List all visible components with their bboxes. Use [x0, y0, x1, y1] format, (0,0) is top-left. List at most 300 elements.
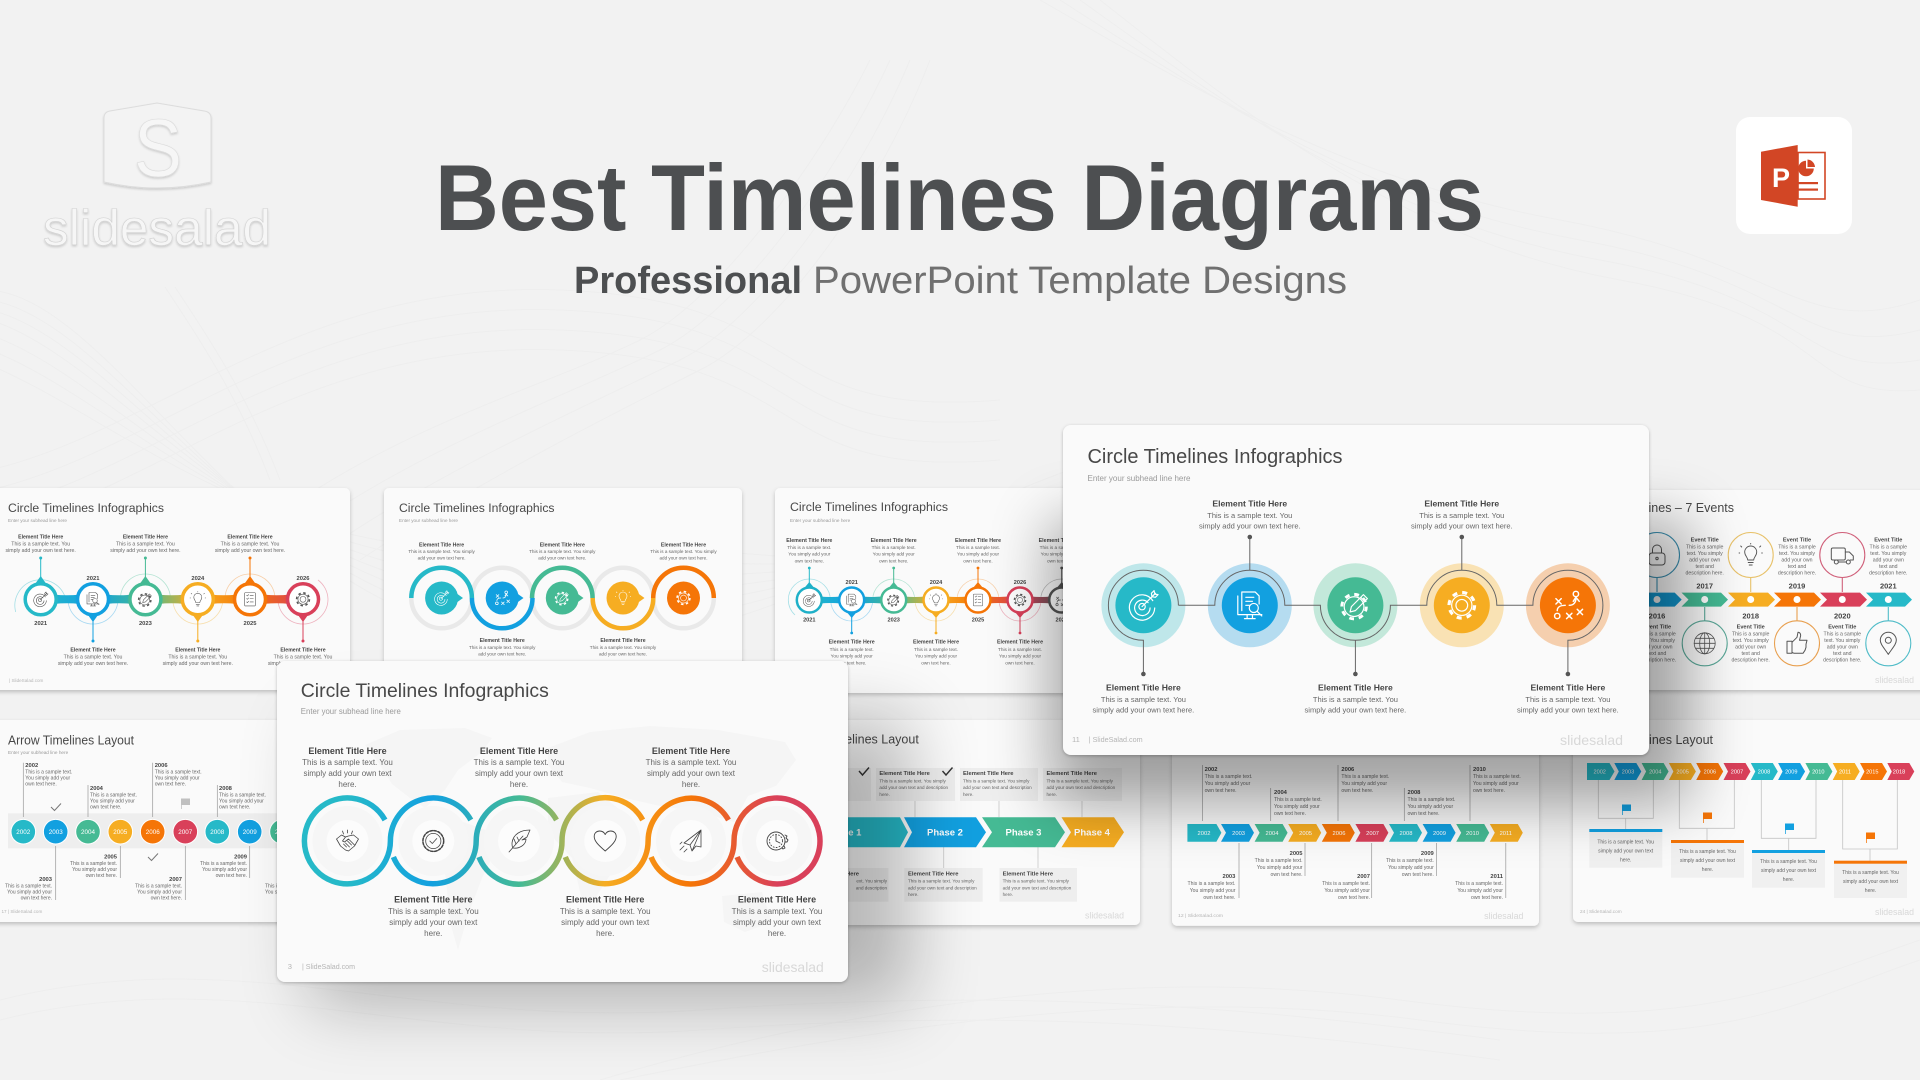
- element text blocks: simply add your own text: [475, 769, 564, 778]
- year circle labels: 2005: [113, 829, 128, 836]
- event text blocks: This is a sample: [1638, 631, 1676, 637]
- panel: S-wave circle timeline: Enter your subhead line here: [399, 518, 458, 523]
- shadow of left main card: [310, 720, 910, 1005]
- element text blocks: This is a sample text. You: [64, 654, 123, 660]
- year circle labels: 2010: [275, 829, 289, 836]
- element text blocks: Element Title Here: [123, 534, 168, 540]
- element text blocks: own text here.: [921, 660, 951, 665]
- element text blocks: add your own text here.: [659, 556, 708, 560]
- box text: here.: [1865, 888, 1876, 894]
- event text blocks: Event Title: [1828, 624, 1856, 630]
- year text blocks: 2005: [104, 854, 118, 860]
- element text blocks: here.: [682, 780, 700, 789]
- box text blocks: ext. You simply: [856, 879, 888, 884]
- year text blocks: You simply add your: [1257, 865, 1303, 871]
- element text blocks: This is a sample text.: [787, 545, 831, 550]
- box text blocks: [800, 771, 1116, 897]
- event text blocks: text. You simply: [1687, 551, 1723, 557]
- year text blocks: You simply add your: [7, 890, 52, 896]
- year text blocks: You simply add your: [1388, 865, 1434, 871]
- year circle labels: 2009: [243, 829, 257, 836]
- brackets: [1598, 780, 1897, 861]
- element text blocks: simply add your own text here.: [215, 548, 285, 554]
- year text blocks: You simply add your: [72, 867, 117, 873]
- element text blocks: simply add your own text: [389, 918, 478, 927]
- year text blocks: This is a sample text.: [25, 770, 72, 776]
- box text blocks: mply text. You: [800, 778, 829, 783]
- element text blocks: Element Title Here: [308, 746, 387, 756]
- element text blocks: simply add your own text: [561, 918, 650, 927]
- event text blocks: description here.: [1869, 571, 1907, 577]
- year text blocks: This is a sample text.: [1205, 774, 1252, 780]
- element text blocks: here.: [596, 929, 614, 938]
- year text blocks: 2006: [1341, 767, 1355, 773]
- event text blocks: 2016: [1649, 611, 1665, 620]
- year arrows: [1187, 824, 1523, 842]
- box text: This is a sample text. You: [1597, 840, 1654, 846]
- icon circles: [1634, 532, 1911, 666]
- element text blocks: Element Title Here: [1212, 499, 1287, 509]
- timeline nodes: [788, 567, 1083, 634]
- event text blocks: 2019: [1789, 582, 1805, 591]
- top boxes: [800, 768, 1122, 902]
- text boxes with colored bars: [1589, 829, 1907, 898]
- element text blocks: simply add your own text here.: [1517, 706, 1619, 715]
- title: Best Timelines Diagrams: [435, 145, 1484, 250]
- year text blocks: This is a sample text.: [1408, 797, 1455, 803]
- timeline nodes: [15, 556, 328, 642]
- year text blocks: You simply add your: [265, 890, 310, 896]
- year text blocks: This is a sample text.: [1473, 774, 1521, 780]
- year circle labels: 2008: [210, 829, 225, 836]
- event text blocks: add your own: [1827, 644, 1858, 650]
- panel: arrow timelines with flags: slidesalad: [1875, 907, 1914, 917]
- year band: [8, 813, 298, 848]
- box text blocks: This is a sample text. You simply: [1046, 778, 1114, 783]
- element text blocks: Element Title Here: [1318, 683, 1393, 693]
- year arrows: 2004: [1649, 770, 1662, 776]
- year text blocks: own text here.: [25, 782, 57, 788]
- logo shield: [104, 103, 211, 188]
- year text blocks: This is a sample text.: [1188, 881, 1235, 887]
- event text blocks: text. You simply: [1779, 551, 1815, 557]
- year circle labels: 2004: [81, 829, 95, 836]
- colored wave: [411, 568, 714, 628]
- inner filled circles: [1115, 577, 1596, 633]
- interlocking ring chain: [304, 798, 820, 884]
- year text blocks: own text here.: [1402, 872, 1434, 878]
- event text blocks: 2021: [1880, 582, 1897, 591]
- element text blocks: Element Title Here: [1106, 683, 1181, 693]
- year text blocks: [1188, 767, 1521, 901]
- subtitle: [574, 260, 1347, 302]
- year text blocks: You simply add your: [155, 776, 200, 782]
- year text blocks: This is a sample text.: [1255, 858, 1302, 864]
- panel: circle timeline with year labels (top left): | SlideSalad.com: [9, 678, 44, 683]
- element text blocks: You simply add your: [788, 552, 831, 557]
- year arrows: 2003: [1622, 770, 1634, 776]
- year text blocks: This is a sample text.: [1274, 797, 1322, 803]
- year arrows: 2007: [1366, 831, 1379, 837]
- box text: here.: [1620, 858, 1631, 864]
- event text blocks: [1638, 538, 1907, 664]
- panel: S-wave circle timeline: Circle Timelines Infographics: [399, 501, 554, 515]
- year text blocks: You simply add your: [1408, 804, 1453, 810]
- year labels: 2025: [244, 621, 257, 627]
- year text blocks: own text here.: [1203, 895, 1235, 901]
- element text blocks: This is a sample text. You simply: [590, 645, 657, 650]
- panel: arrow timeline ten years: [1172, 720, 1539, 926]
- box text: This is a sample text. You: [1760, 859, 1817, 865]
- year text blocks: own text here.: [1270, 872, 1302, 878]
- year text blocks: This is a sample text.: [135, 884, 182, 890]
- event text blocks: This is a sample: [1824, 631, 1861, 637]
- box text: simply add your own text: [1680, 858, 1736, 864]
- element text blocks: You simply add your: [999, 654, 1041, 659]
- panel: arrow timelines phases: Arrow Timelines Layout: [789, 732, 919, 746]
- event text blocks: 2020: [1834, 611, 1851, 620]
- panel: circle timeline seven nodes: Circle Timelines Infographics: [790, 500, 948, 514]
- year arrows: 2010: [1812, 770, 1825, 776]
- year arrows: 2008: [1400, 831, 1412, 837]
- phase arrows: Phase 2: [927, 828, 963, 838]
- world map: [365, 726, 796, 950]
- year labels: 2023: [887, 618, 900, 624]
- footer: | SlideSalad.com: [1089, 735, 1143, 744]
- year arrows: 2003: [1232, 831, 1245, 837]
- element text blocks: simply add your own text here.: [58, 661, 128, 667]
- element text blocks: simply add your own text: [733, 918, 822, 927]
- arrow band: [1580, 593, 1912, 607]
- event text blocks: description here.: [1732, 658, 1770, 664]
- element text blocks: This is a sample text.: [872, 545, 916, 550]
- event text blocks: text and: [1695, 564, 1714, 570]
- year text blocks: 2009: [1421, 851, 1435, 857]
- box text blocks: add your own text and description: [908, 885, 977, 890]
- year text blocks: You simply add your: [219, 798, 264, 804]
- box text blocks: add your own text and description: [1003, 885, 1072, 890]
- element text blocks: own text here.: [1047, 558, 1076, 563]
- element text blocks: [6, 534, 338, 667]
- phase arrows: Phase 1: [826, 828, 862, 838]
- year circles: [11, 819, 294, 844]
- element text blocks: This is a sample text. You: [388, 907, 479, 916]
- year arrows: 2009: [1785, 770, 1798, 776]
- connector line: [1108, 537, 1603, 674]
- year text blocks: 2002: [1205, 767, 1218, 773]
- panel: arrow timelines with flags: [1573, 720, 1920, 922]
- year text blocks: own text here.: [1471, 895, 1503, 901]
- year text blocks: This is a sample text.: [200, 861, 247, 867]
- event text blocks: add your own: [1781, 558, 1813, 564]
- box text blocks: and description: [856, 885, 887, 890]
- year text blocks: own text here.: [86, 873, 117, 879]
- event text blocks: 2018: [1742, 611, 1759, 620]
- logo wordmark: slidesalad: [43, 200, 271, 256]
- phase arrows: [760, 817, 1124, 847]
- event text blocks: This is a sample: [1686, 544, 1724, 550]
- logo: slidesalad emboss: [43, 103, 271, 256]
- year labels: 2021: [87, 576, 100, 582]
- year text blocks: This is a sample text.: [219, 792, 266, 798]
- element text blocks: simply add your own text here.: [110, 548, 181, 554]
- year text blocks: 2010: [1473, 767, 1486, 773]
- year arrows: 2002: [1198, 831, 1210, 837]
- element text blocks: simply add your own text: [647, 769, 736, 778]
- element text blocks: simply add your own text here.: [1199, 522, 1301, 530]
- year text blocks: own text here.: [1473, 788, 1505, 794]
- panel: arrow timelines phases: slidesalad: [1085, 910, 1124, 920]
- element text blocks: simply add your own text here.: [6, 548, 76, 554]
- filled circles with icons: [425, 582, 700, 614]
- element text blocks: add your own text here.: [538, 556, 586, 560]
- element text blocks: simply add your own text here.: [1093, 706, 1194, 715]
- panel: circle timeline with year labels (top left): Enter your subhead line here: [8, 518, 67, 523]
- watermark: slidesalad: [762, 959, 824, 975]
- event text blocks: add your own: [1689, 558, 1720, 564]
- year text blocks: You simply add your: [1324, 888, 1370, 894]
- year text blocks: own text here.: [219, 804, 250, 810]
- element text blocks: This is a sample text.: [830, 647, 874, 652]
- element text blocks: simply add your own text: [303, 769, 392, 778]
- event text blocks: Event Title: [1783, 538, 1811, 544]
- year text blocks: 2006: [155, 763, 168, 769]
- box text blocks: This is a sample text. You simply: [963, 778, 1030, 783]
- element text blocks: This is a sample text.: [998, 647, 1042, 652]
- connector dots: [1141, 535, 1570, 676]
- panel: timelines 7 events: slidesalad: [1875, 675, 1914, 685]
- year circle labels: 2003: [49, 829, 63, 836]
- panel: timelines 7 events: Icon Timelines – 7 Events: [1592, 501, 1734, 515]
- gray rings: [411, 568, 714, 628]
- box text blocks: here.: [1003, 892, 1013, 897]
- box text blocks: add your own text and description: [879, 785, 949, 790]
- year text blocks: This is a sample text.: [1341, 774, 1389, 780]
- year labels: 2026: [297, 576, 310, 582]
- year text blocks: 2007: [1357, 874, 1370, 880]
- event text blocks: add your own: [1735, 644, 1766, 650]
- element text blocks: Element Title Here: [871, 538, 917, 544]
- event text blocks: Event Title: [1643, 624, 1671, 630]
- year arrows: 2011: [1500, 831, 1512, 837]
- footer: | SlideSalad.com: [302, 962, 355, 971]
- year text blocks: This is a sample text.: [155, 770, 202, 776]
- year circle labels: [16, 829, 289, 836]
- event text blocks: text. You simply: [1733, 638, 1769, 644]
- element text blocks: This is a sample text. You: [1207, 511, 1292, 520]
- element text blocks: Element Title Here: [600, 638, 646, 644]
- check icons: [859, 768, 952, 775]
- event text blocks: description here.: [1823, 658, 1861, 664]
- leader lines: [1202, 765, 1506, 898]
- element text blocks: Element Title Here: [540, 543, 585, 549]
- panel: circle timeline seven nodes: Enter your subhead line here: [790, 518, 851, 523]
- element text blocks: Element Title Here: [913, 640, 959, 646]
- box text blocks: Element Title Here: [879, 771, 931, 777]
- element text blocks: [786, 538, 1085, 665]
- watermark: slidesalad: [1560, 732, 1623, 748]
- element text blocks: This is a sample text. You: [1525, 695, 1610, 704]
- element text blocks: Element Title Here: [1530, 683, 1606, 693]
- year text blocks: You simply add your: [1190, 888, 1236, 894]
- event text blocks: Event Title: [1874, 538, 1902, 544]
- element text blocks: This is a sample text. You simply: [408, 549, 475, 554]
- element text blocks: You simply add your: [915, 654, 957, 659]
- year text blocks: You simply add your: [25, 776, 70, 782]
- year text blocks: [5, 763, 312, 902]
- box text blocks: This is a sample text. You simply: [1003, 879, 1070, 884]
- event text blocks: description here.: [1778, 571, 1816, 577]
- element text blocks: This is a sample text. You simply: [650, 549, 717, 554]
- year arrows: 2010: [1466, 831, 1479, 837]
- footer: 3: [288, 962, 292, 971]
- year arrows: 2006: [1333, 831, 1345, 837]
- element text blocks: This is a sample text. You: [302, 758, 393, 767]
- year text blocks: This is a sample text.: [265, 884, 312, 890]
- year labels: 2021: [845, 580, 858, 586]
- year text blocks: This is a sample text.: [1455, 881, 1503, 887]
- year labels: 2024: [191, 576, 205, 582]
- icons: checks and flag: [51, 798, 190, 860]
- element text blocks: This is a sample text. You: [474, 758, 564, 767]
- connectors: [915, 801, 1082, 868]
- year circle labels: 2002: [16, 829, 31, 836]
- event text blocks: text. You simply: [1870, 551, 1907, 557]
- ring icons: [336, 830, 788, 852]
- panel: arrow timeline ten years: 12 | SlideSalad.com: [1178, 913, 1223, 919]
- year text blocks: This is a sample text.: [90, 792, 137, 798]
- year text blocks: 2007: [169, 877, 182, 883]
- event text blocks: text and: [1833, 651, 1852, 657]
- element text blocks: Element Title Here: [997, 640, 1043, 646]
- box text blocks: add your own text and description: [963, 785, 1032, 790]
- element text blocks: You simply add your: [957, 552, 999, 557]
- year labels: 2027: [1055, 618, 1068, 624]
- element text blocks: This is a sample text. You simply: [529, 549, 596, 554]
- element text blocks: Element Title Here: [18, 534, 63, 540]
- element text blocks: This is a sample text. You simply: [469, 645, 536, 650]
- year arrows: 2007: [1731, 770, 1743, 776]
- element text blocks: own text here.: [963, 558, 993, 563]
- element text blocks: here.: [424, 929, 442, 938]
- year circle labels: 2006: [146, 829, 160, 836]
- element text blocks: Element Title Here: [786, 538, 832, 544]
- year arrows: 2018: [1893, 770, 1905, 776]
- box text blocks: add your own text and description: [1046, 785, 1116, 790]
- box text: This is a sample text. You: [1679, 849, 1736, 855]
- panel: circle timeline seven nodes: [775, 488, 1133, 693]
- event text blocks: text. You simply: [1639, 638, 1675, 644]
- year labels: 2026: [1014, 580, 1026, 586]
- year text blocks: 2008: [1408, 790, 1421, 796]
- year arrows: 2005: [1299, 831, 1312, 837]
- year text blocks: 2004: [90, 786, 104, 792]
- element text blocks: This is a sample text. You: [1419, 511, 1504, 520]
- element text blocks: simply add your own text here.: [1305, 706, 1406, 715]
- element text blocks: Element Title Here: [1039, 538, 1085, 544]
- subheading: Enter your subhead line here: [1088, 474, 1191, 483]
- element text blocks: Element Title Here: [652, 746, 730, 756]
- heading: Circle Timelines Infographics: [301, 681, 549, 702]
- box text blocks: Element Title Here: [1003, 871, 1054, 877]
- element text blocks: This is a sample text. You: [11, 542, 70, 548]
- year text blocks: own text here.: [1341, 788, 1373, 794]
- year text blocks: You simply add your: [137, 890, 182, 896]
- panel: S-wave circle timeline: [384, 488, 742, 690]
- year arrows: [1587, 763, 1914, 780]
- element text blocks: Element Title Here: [738, 895, 816, 905]
- element text blocks: Element Title Here: [661, 543, 706, 549]
- box text blocks: This is a sample text. You simply: [908, 879, 975, 884]
- element text blocks: Element Title Here: [1424, 499, 1499, 509]
- box text blocks: here.: [879, 792, 890, 797]
- year arrows: 2015: [1866, 770, 1879, 776]
- event text blocks: This is a sample: [1732, 631, 1770, 637]
- event text blocks: description here.: [1638, 658, 1676, 664]
- element text blocks: own text here.: [795, 558, 824, 563]
- year text blocks: 2008: [219, 786, 233, 792]
- year text blocks: You simply add your: [1205, 781, 1251, 787]
- element text blocks: This is a sample text.: [914, 647, 958, 652]
- box text blocks: here.: [908, 892, 918, 897]
- year text blocks: own text here.: [151, 896, 182, 902]
- element text blocks: Element Title Here: [829, 640, 875, 646]
- year labels: 2021: [34, 621, 48, 627]
- box text: simply add your own text: [1598, 848, 1654, 854]
- element text blocks: This is a sample text. You: [168, 654, 227, 660]
- element text blocks: This is a sample text. You: [646, 758, 736, 767]
- element text blocks: add your own text here.: [478, 651, 526, 656]
- event text blocks: text and: [1741, 651, 1760, 657]
- event text blocks: add your own: [1873, 558, 1904, 564]
- year text blocks: This is a sample text.: [1386, 858, 1434, 864]
- element text blocks: add your own text here.: [599, 651, 647, 656]
- panel: arrow timelines with flags: Arrow Timelines Layout: [1583, 733, 1714, 747]
- year text blocks: 2003: [39, 877, 53, 883]
- icon: PowerPoint: P: [1772, 163, 1790, 193]
- panel: arrow timelines with year circles: 17 | SlideSalad.com: [2, 909, 42, 914]
- event text blocks: text. You simply: [1824, 638, 1861, 644]
- year text blocks: own text here.: [21, 896, 52, 902]
- box text blocks: description here text: [800, 785, 842, 790]
- element text blocks: Element Title Here: [175, 648, 220, 654]
- element text blocks: Element Title Here: [280, 648, 326, 654]
- box text: simply add your own text: [1843, 879, 1899, 885]
- year text blocks: You simply add your: [202, 867, 247, 873]
- year labels: [803, 580, 1068, 624]
- element text blocks: You simply add your: [831, 654, 873, 659]
- element text blocks: add your own text here.: [418, 556, 466, 560]
- panel: arrow timeline ten years: slidesalad: [1484, 911, 1524, 921]
- panel: arrow timelines phases: [700, 720, 1140, 925]
- element text blocks: own text here.: [879, 558, 908, 563]
- box text: here.: [1702, 867, 1713, 873]
- icon: PowerPoint: [1736, 117, 1852, 234]
- event text blocks: description here.: [1686, 571, 1724, 577]
- heading: Circle Timelines Infographics: [1088, 446, 1343, 468]
- box text blocks: This is a sample text. You simply: [879, 778, 946, 783]
- footer: 11: [1072, 735, 1080, 744]
- element text blocks: own text here.: [1005, 660, 1035, 665]
- year labels: 2023: [139, 621, 153, 627]
- shadow of right main card: [1050, 520, 1690, 805]
- year text blocks: own text here.: [90, 804, 121, 810]
- year text blocks: own text here.: [1338, 895, 1370, 901]
- box text: This is a sample text. You: [1842, 870, 1899, 876]
- element text blocks: This is a sample text. You: [221, 542, 280, 548]
- element text blocks: simply add your own text here.: [163, 661, 233, 667]
- year text blocks: 2003: [1222, 874, 1236, 880]
